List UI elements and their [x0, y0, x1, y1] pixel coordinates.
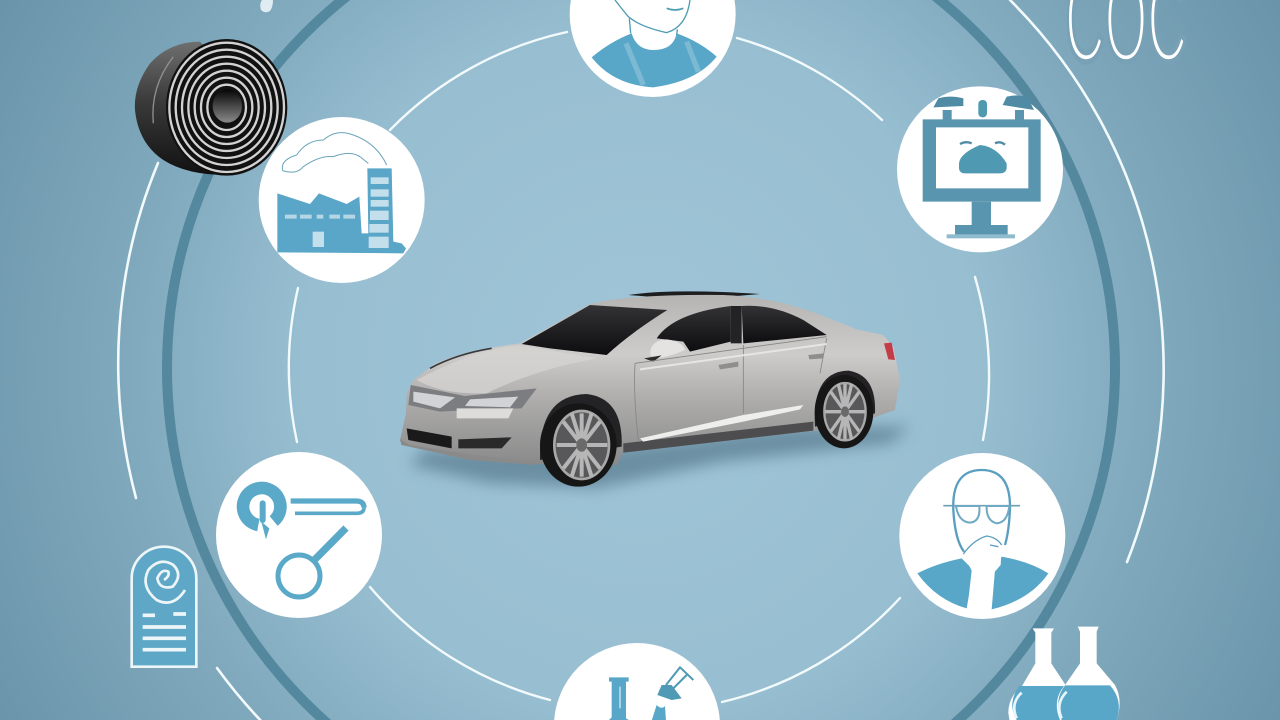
- door handles: [718, 353, 823, 369]
- icon circle: thinking man with glasses: [899, 453, 1065, 619]
- icon circle: factory: [259, 117, 425, 283]
- small white speck at top: [260, 0, 273, 12]
- rear wheel: [815, 375, 873, 448]
- window pillar: [731, 306, 742, 343]
- headlight: [408, 385, 537, 412]
- lower sill shadow: [623, 422, 813, 453]
- hood highlight: [417, 345, 597, 393]
- front bumper grille: [407, 428, 452, 448]
- front side window: [657, 306, 731, 352]
- front wheel: [540, 403, 617, 487]
- car body: [400, 295, 900, 465]
- icon: conveyor belt roll: [135, 39, 287, 176]
- icon circle: key and magnifier: [216, 452, 382, 618]
- icon circle: engineer portrait: [570, 0, 736, 97]
- roof dark panel: [628, 291, 760, 300]
- tail light: [884, 343, 895, 360]
- hood far edge line: [430, 348, 492, 368]
- icon circle: billboard: [897, 86, 1063, 252]
- inner thin ring segments: [289, 32, 989, 702]
- icon: scroll document: [132, 547, 196, 667]
- door lines and beltline: [635, 337, 827, 440]
- windshield: [522, 305, 667, 355]
- car shadow: [410, 427, 910, 488]
- icon: twin flasks: [1008, 627, 1120, 720]
- rear side window: [742, 306, 827, 343]
- sill highlight: [640, 405, 803, 442]
- icon circle: lab bottle and tongs: [554, 643, 720, 720]
- mirror: [650, 339, 685, 358]
- thick ring: [167, 0, 1115, 720]
- car: [400, 291, 910, 488]
- wheel arch front: [540, 394, 622, 460]
- wheel arch rear: [815, 371, 875, 427]
- front bumper highlight: [457, 408, 513, 418]
